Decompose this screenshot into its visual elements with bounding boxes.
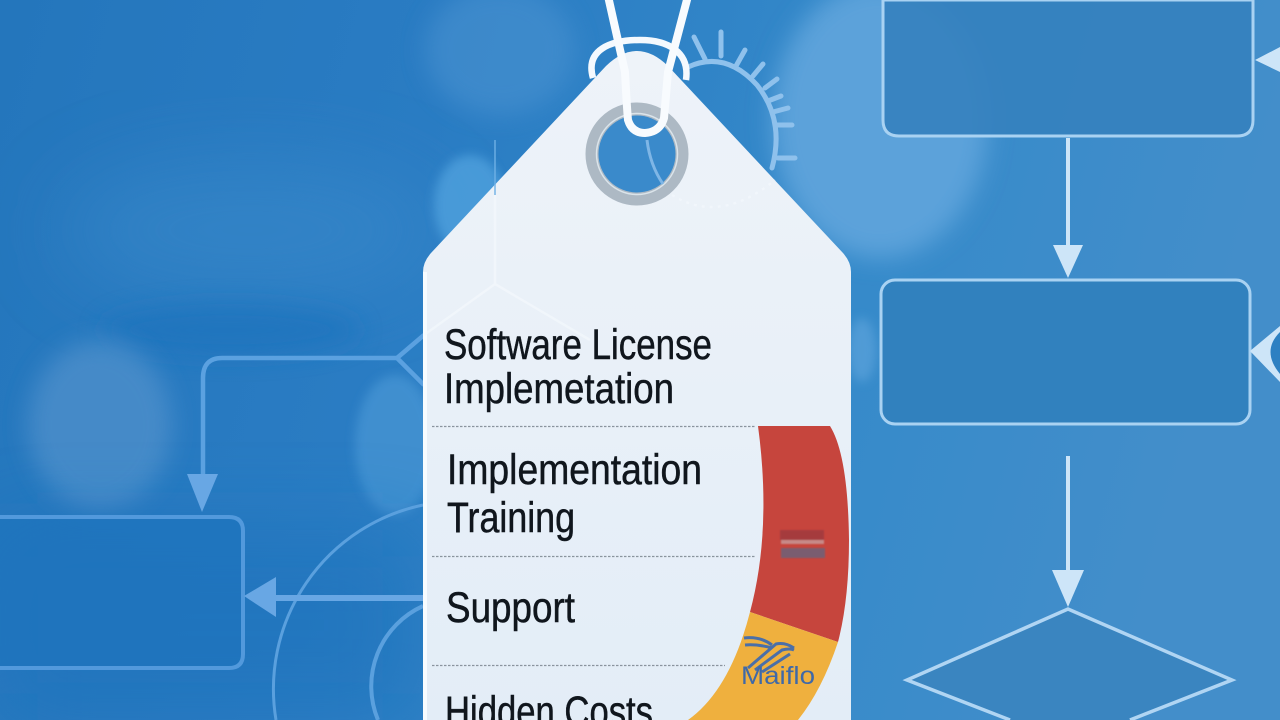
item: support: Support xyxy=(446,584,575,632)
arrow: box two to decision xyxy=(1052,456,1084,607)
tag body xyxy=(423,51,851,720)
large circle outline xyxy=(273,505,423,720)
small circle outline xyxy=(371,606,423,720)
box: left xyxy=(0,517,243,668)
item: software license xyxy=(444,321,712,413)
arrow: down to left box xyxy=(187,474,218,512)
red band xyxy=(750,426,849,642)
divider lines xyxy=(432,426,756,666)
arrow: top right input xyxy=(1255,47,1280,72)
arrow: box one to box two xyxy=(1053,138,1083,278)
item: implementation training: Implementation xyxy=(447,446,702,494)
item: software license: Implemetation xyxy=(444,365,674,413)
connector to left box xyxy=(203,335,424,478)
arrow: middle right input xyxy=(1250,326,1280,382)
decision diamond xyxy=(907,609,1232,720)
item: implementation training: Training xyxy=(447,494,575,542)
faint background lines on tag xyxy=(424,180,775,340)
tag loop back strand xyxy=(591,40,686,80)
yellow band logo xyxy=(741,638,815,690)
item: software license: Software License xyxy=(444,321,712,369)
yellow band logo: Maiflo xyxy=(741,662,815,690)
price tag xyxy=(423,0,851,720)
item: implementation training xyxy=(447,446,702,542)
string xyxy=(608,0,688,133)
red band label mark xyxy=(780,530,825,558)
box: middle right xyxy=(881,280,1250,424)
tag edge highlight xyxy=(423,272,427,720)
box: top right xyxy=(883,0,1253,136)
flowchart: left side xyxy=(0,335,424,720)
arrow: into left box xyxy=(244,577,424,617)
gear outline behind tag xyxy=(688,32,795,168)
yellow band xyxy=(688,612,838,720)
faint line above tag xyxy=(494,140,496,195)
flowchart: right side xyxy=(881,0,1280,720)
eyelet ring xyxy=(592,109,682,199)
